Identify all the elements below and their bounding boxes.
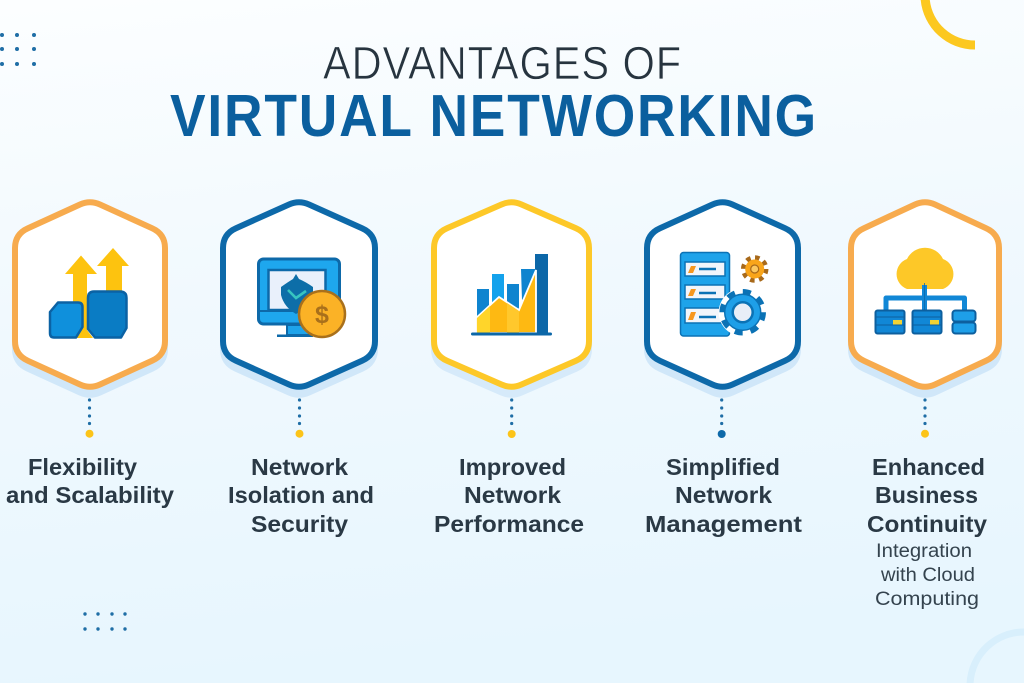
label: Isolation and: [228, 482, 374, 508]
label: Continuity: [867, 511, 987, 537]
label: Business: [875, 482, 978, 508]
label: Improved: [459, 454, 566, 480]
label: [6, 454, 174, 508]
label: Enhanced: [872, 454, 985, 480]
decorative dots: bottom left: [83, 612, 127, 631]
label: and Scalability: [6, 482, 174, 508]
label: Management: [645, 511, 802, 537]
title: ADVANTAGES OF: [323, 37, 682, 89]
panel: flexibility and scalability: [6, 202, 174, 508]
label: Network: [464, 482, 561, 508]
connector dots: [296, 398, 304, 438]
label: Simplified: [666, 454, 780, 480]
sublabel: [875, 541, 979, 610]
icon: server rack and gears: [680, 252, 767, 336]
decorative arc: top right: [921, 0, 975, 50]
icon: growth arrows and blocks: [50, 248, 129, 338]
decorative ring: bottom right: [967, 628, 1024, 683]
title: [170, 37, 818, 149]
sublabel: Integration: [876, 541, 972, 562]
hexagon badge: [434, 202, 589, 395]
title: VIRTUAL NETWORKING: [170, 83, 818, 149]
label: [645, 454, 802, 537]
icon: monitor, shield and coin: [258, 259, 345, 337]
hexagon badge: [647, 202, 798, 395]
icon: bar chart with rising area: [471, 254, 552, 336]
icon: monitor, shield and coin: $: [315, 301, 329, 329]
label: [434, 454, 584, 537]
hexagon badge: [15, 202, 165, 395]
hexagon badge: [223, 202, 375, 395]
sublabel: with Cloud: [880, 565, 975, 586]
label: Performance: [434, 511, 584, 537]
connector dots: [921, 398, 929, 438]
label: Network: [675, 482, 772, 508]
label: [228, 454, 374, 537]
panel: improved network performance: [434, 202, 589, 537]
decorative dots: top left: [0, 33, 36, 66]
label: [867, 454, 987, 537]
label: Network: [251, 454, 348, 480]
connector dots: [718, 398, 726, 438]
label: Flexibility: [28, 454, 137, 480]
connector dots: [86, 398, 94, 438]
label: Security: [251, 511, 348, 537]
panel: enhanced business continuity: [851, 202, 999, 610]
icon: cloud connected to servers: [876, 248, 976, 334]
panel: simplified network management: [645, 202, 802, 537]
panel: network isolation and security: [223, 202, 375, 537]
connector dots: [508, 398, 516, 438]
sublabel: Computing: [875, 589, 979, 610]
hexagon badge: [851, 202, 999, 395]
